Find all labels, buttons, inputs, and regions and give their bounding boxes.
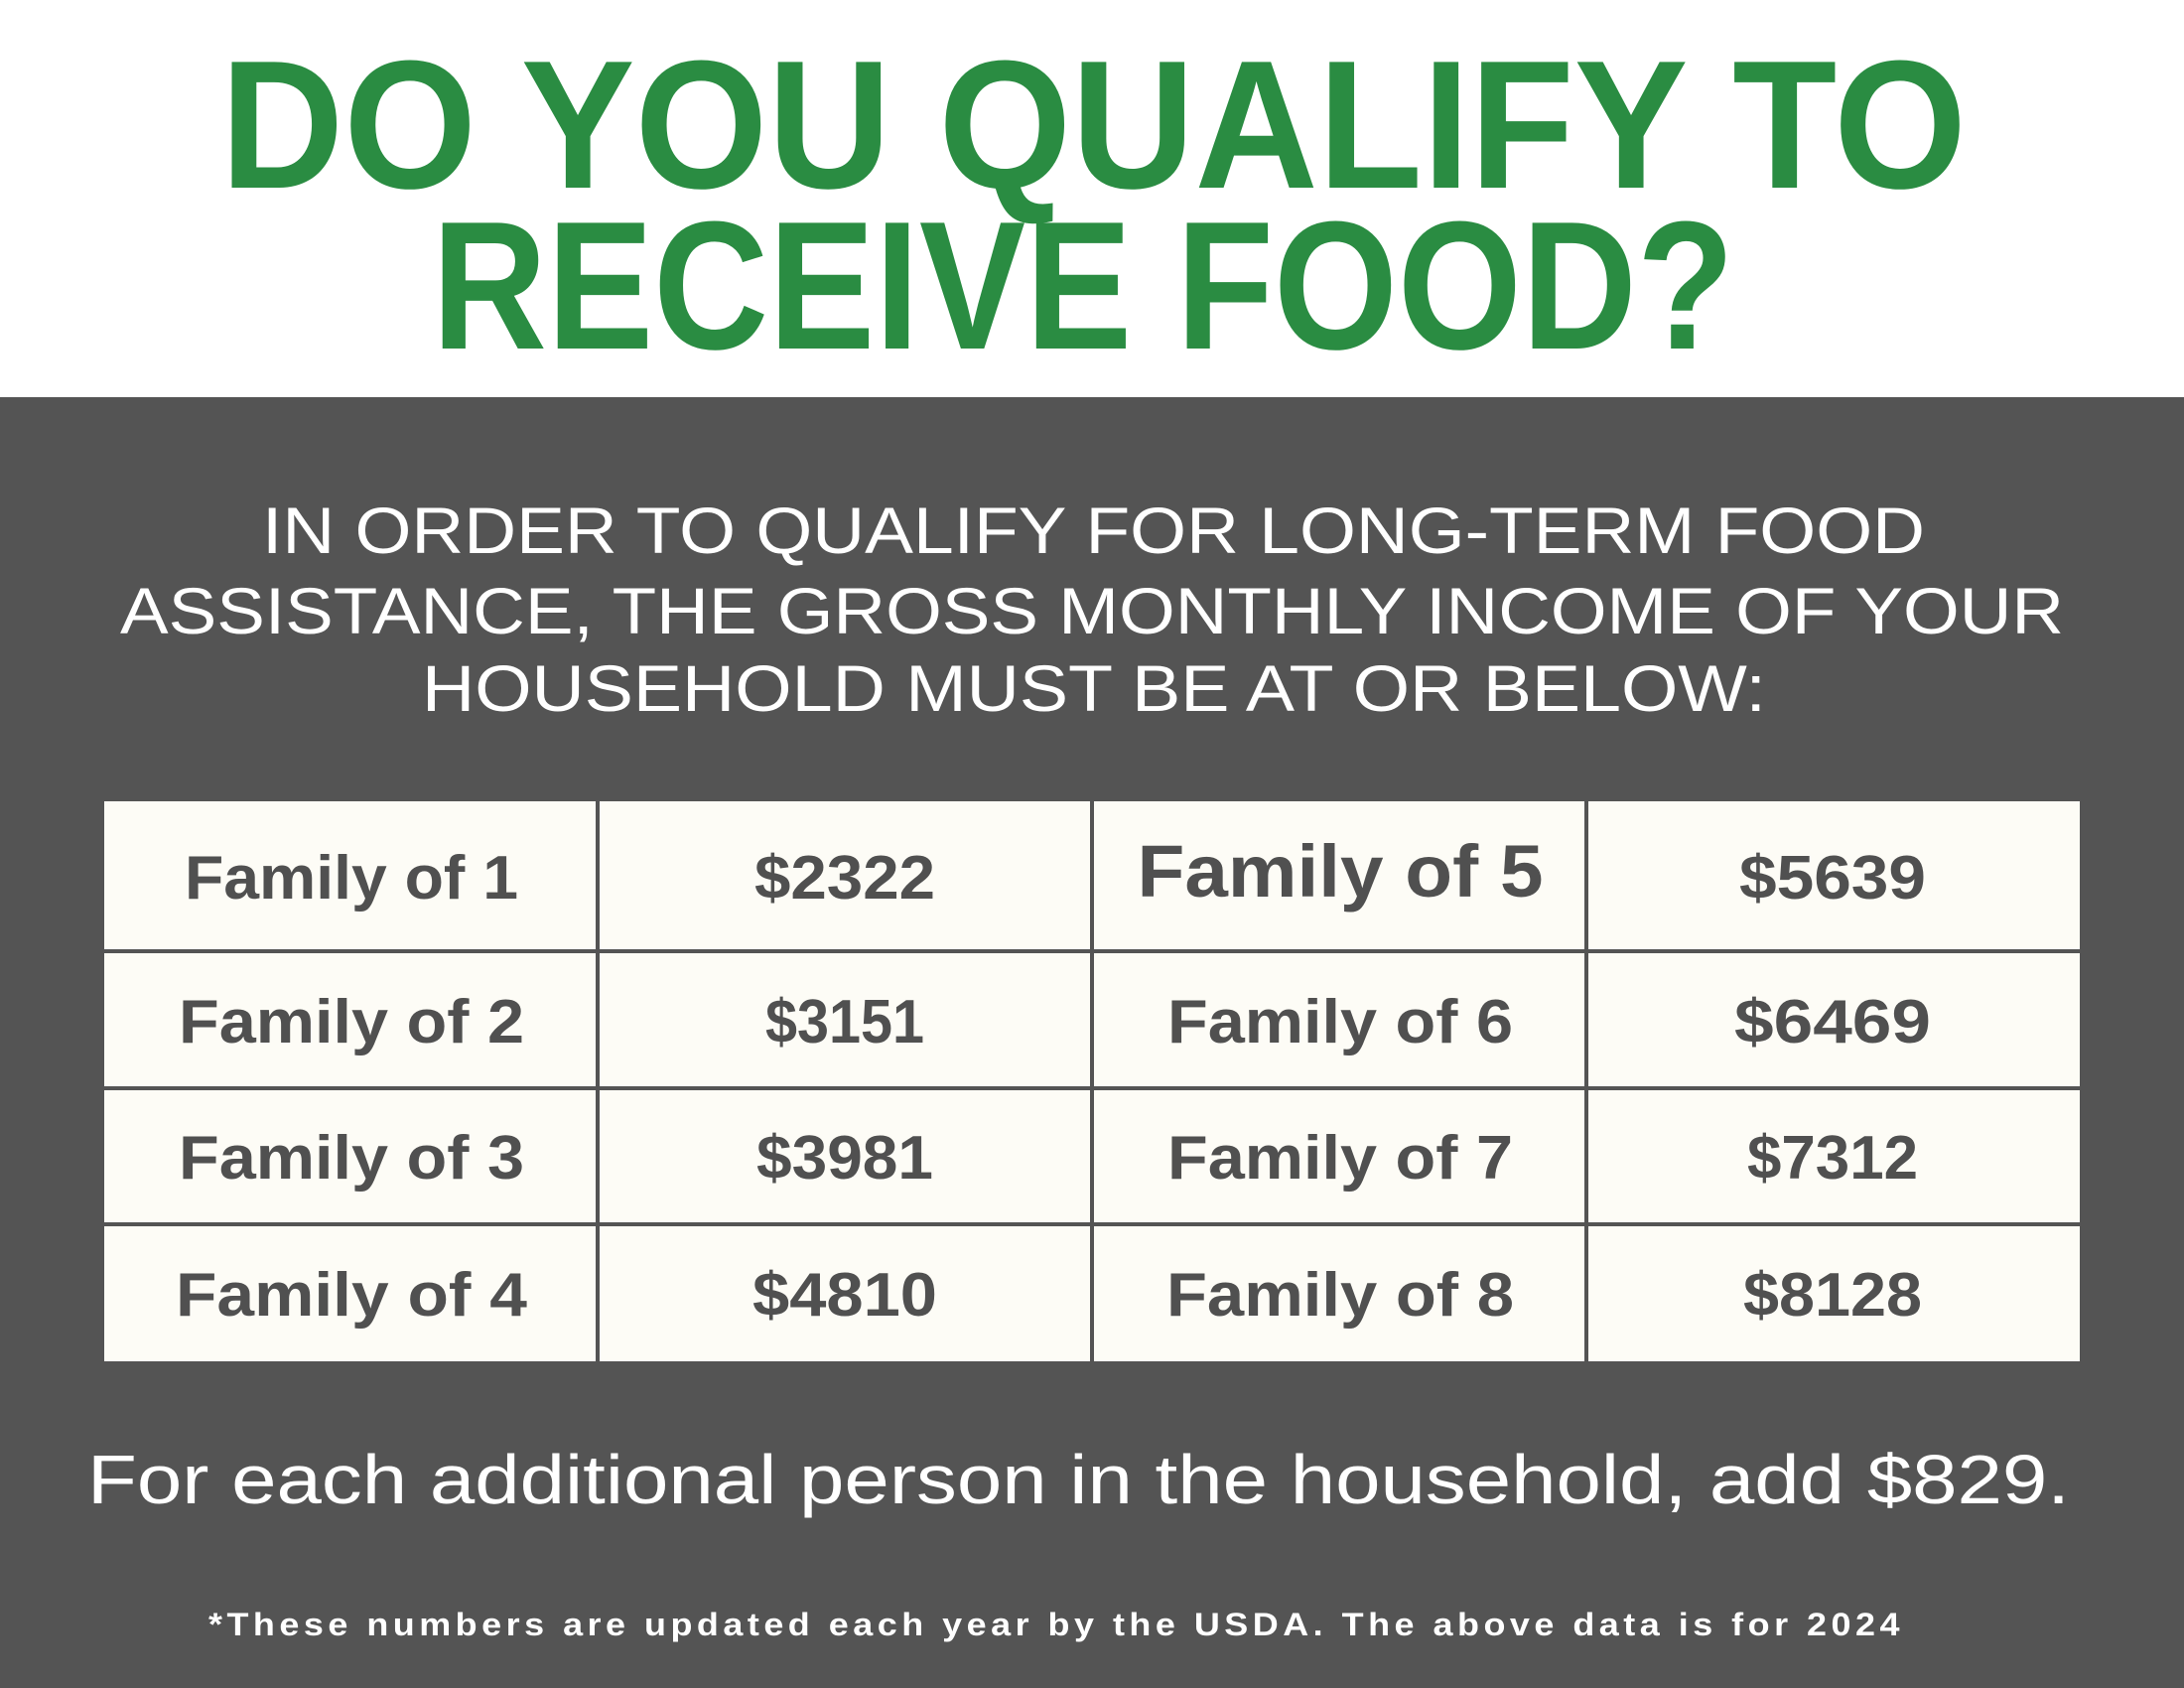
- table text: Family of 1: [185, 844, 518, 913]
- table text: Family of 4: [176, 1261, 528, 1330]
- table text: Family of 8: [1166, 1261, 1514, 1330]
- additional person note: For each additional person in the household, add $829.: [87, 1441, 2070, 1518]
- table text: $3151: [765, 988, 924, 1056]
- table text: [176, 830, 1931, 1330]
- table text: Family of 2: [179, 988, 524, 1056]
- table text: $5639: [1739, 844, 1926, 913]
- income table: [104, 801, 2080, 1361]
- table text: $2322: [754, 844, 935, 913]
- title: [220, 22, 1967, 387]
- table text: $8128: [1743, 1261, 1922, 1330]
- subtitle: ASSISTANCE, THE GROSS MONTHLY INCOME OF YOUR: [120, 574, 2064, 647]
- table text: $7312: [1747, 1124, 1918, 1193]
- table text: $3981: [756, 1124, 933, 1193]
- table text: Family of 7: [1167, 1124, 1513, 1193]
- table text: $6469: [1734, 988, 1931, 1056]
- title: RECEIVE FOOD?: [432, 183, 1734, 387]
- table text: Family of 5: [1138, 830, 1543, 913]
- subtitle: [120, 493, 2064, 725]
- footnote: *These numbers are updated each year by the USDA. The above data is for 2024: [208, 1607, 1904, 1642]
- title: DO YOU QUALIFY TO: [220, 22, 1967, 226]
- table text: Family of 6: [1167, 988, 1513, 1056]
- subtitle: HOUSEHOLD MUST BE AT OR BELOW:: [422, 651, 1766, 725]
- table text: $4810: [752, 1261, 937, 1330]
- subtitle: IN ORDER TO QUALIFY FOR LONG-TERM FOOD: [262, 493, 1925, 567]
- table text: Family of 3: [179, 1124, 524, 1193]
